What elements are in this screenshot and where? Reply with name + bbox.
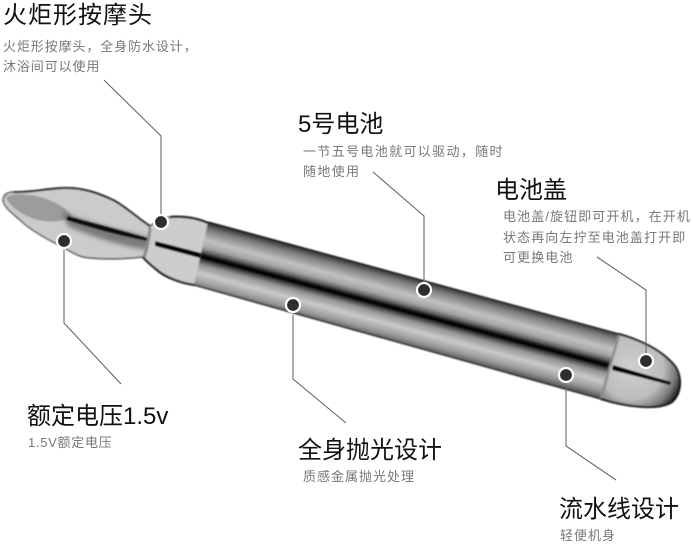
callout: battery cap xyxy=(495,177,691,265)
head top outline xyxy=(14,188,150,226)
callout: streamlined design: 轻便机身 xyxy=(560,528,616,543)
head shading lobe xyxy=(6,194,72,222)
callout: battery cap: 电池盖 xyxy=(495,177,567,204)
callout: torch massage head: 沐浴间可以使用 xyxy=(3,59,100,74)
leader line: AA battery xyxy=(373,172,424,282)
callout: AA battery: 随地使用 xyxy=(303,164,360,179)
leader line: polished body xyxy=(293,315,346,423)
torch massage head xyxy=(3,188,151,259)
callout: full-body polish: 质感金属抛光处理 xyxy=(303,469,415,484)
leader line: battery cap xyxy=(597,257,646,353)
marker dot: polished body xyxy=(286,298,300,312)
marker dot: voltage xyxy=(57,234,71,248)
battery cap xyxy=(601,334,680,407)
polished pen body xyxy=(194,222,619,399)
callout: torch massage head: 火炬形按摩头，全身防水设计， xyxy=(3,39,198,54)
callout: AA battery xyxy=(298,111,504,179)
callout: rated voltage: 1.5V额定电压 xyxy=(28,435,112,450)
callout: rated voltage: 额定电压1.5v xyxy=(27,403,168,430)
leader line: voltage xyxy=(64,250,121,384)
callout: full-body polish xyxy=(298,437,442,484)
marker dot: battery cap xyxy=(639,354,653,368)
callout: streamlined design xyxy=(559,496,679,543)
marker dot: AA battery xyxy=(417,283,431,297)
callout: battery cap: 状态再向左拧至电池盖打开即 xyxy=(503,230,686,244)
leader line: torch head xyxy=(104,80,161,215)
callout: battery cap: 电池盖/旋钮即可开机，在开机 xyxy=(503,209,691,224)
body edge lines xyxy=(194,222,619,399)
leader line: streamlined design xyxy=(566,385,616,480)
callout: AA battery: 5号电池 xyxy=(298,111,383,138)
callout: rated voltage xyxy=(27,403,168,450)
marker dot: torch head xyxy=(154,215,168,229)
callout: full-body polish: 全身抛光设计 xyxy=(298,437,442,464)
callout: streamlined design: 流水线设计 xyxy=(559,496,679,523)
collar dark edges xyxy=(143,217,210,285)
callout: torch massage head: 火炬形按摩头 xyxy=(3,2,153,29)
callout: battery cap: 可更换电池 xyxy=(503,250,574,265)
neck and collar xyxy=(143,217,210,285)
callout: AA battery: 一节五号电池就可以驱动，随时 xyxy=(303,144,504,159)
callout: torch massage head xyxy=(3,2,198,74)
marker dot: streamlined design xyxy=(559,368,573,382)
